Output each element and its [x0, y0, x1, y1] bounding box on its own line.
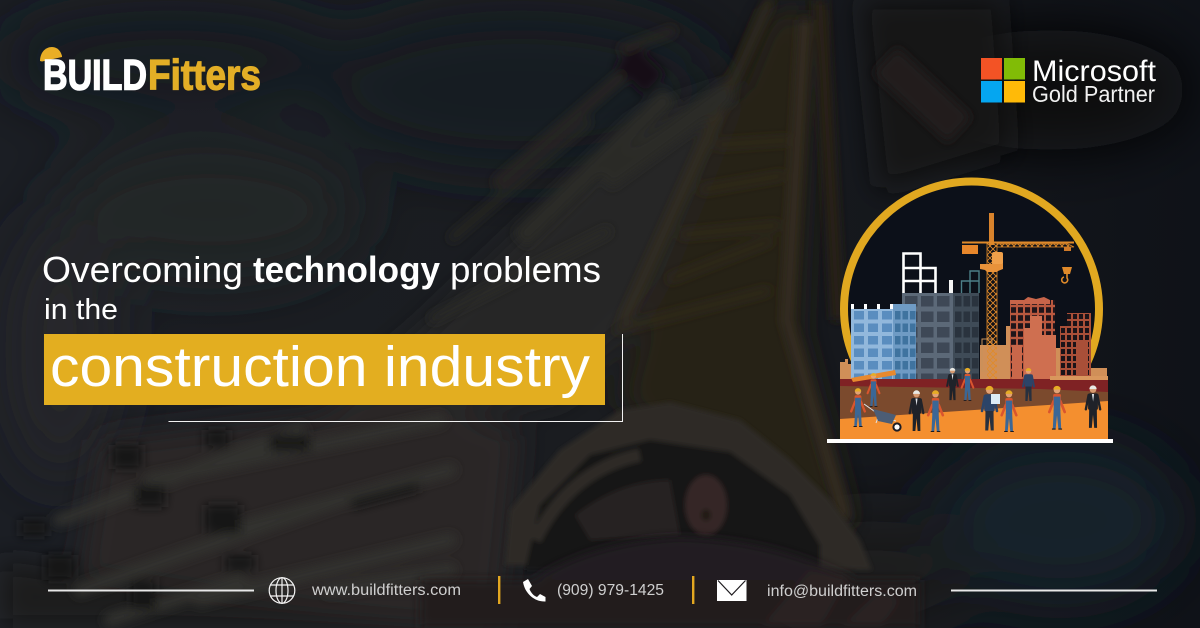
icon: envelope	[717, 580, 746, 601]
phone number: (909) 979-1425	[557, 582, 664, 599]
tan skyline	[840, 325, 1107, 380]
plank	[851, 370, 896, 382]
corner bracket	[168, 334, 622, 422]
shirt and footer tint	[420, 537, 920, 628]
Gold Partner text: Gold Partner	[1032, 81, 1155, 107]
crane	[962, 213, 1074, 379]
red buildings	[982, 297, 1091, 380]
footer rule right	[951, 590, 1157, 592]
dark circle backdrop	[844, 182, 1098, 436]
lattice in photo	[20, 420, 450, 620]
gold divider	[498, 576, 500, 604]
Microsoft wordmark: Microsoft	[1032, 55, 1157, 88]
icon: yellow hard hat	[40, 47, 62, 62]
grey building	[902, 293, 979, 380]
logo word: Fitters: Fitters	[148, 52, 261, 100]
white base line	[827, 439, 1113, 443]
yellow ring	[844, 182, 1099, 436]
website: www.buildfitters.com	[311, 582, 461, 599]
crane base over tan	[987, 340, 997, 380]
workers	[851, 368, 1100, 432]
heading line 1: technology	[253, 249, 440, 290]
illustration: construction site	[827, 182, 1113, 443]
logo: BuildFitters	[40, 47, 261, 100]
heading line 1: problems	[450, 249, 601, 290]
teal frame	[962, 271, 979, 293]
email: info@buildfitters.com	[767, 583, 917, 600]
gold divider	[692, 576, 694, 604]
logo: Microsoft Gold Partner	[981, 55, 1157, 107]
white frame on top of building	[904, 254, 936, 293]
footer rule left	[48, 590, 254, 592]
heading line 1: Overcoming	[42, 249, 243, 290]
highlight bar	[44, 334, 605, 405]
blue building	[851, 304, 916, 380]
icon: globe	[269, 578, 295, 603]
footer contact bar	[48, 576, 1157, 604]
heading line 2: in the	[44, 294, 118, 326]
tower and planks in photo	[430, 0, 960, 520]
highlighted heading: construction industry	[50, 335, 591, 399]
blueprint	[991, 394, 1000, 404]
logo word: BUILD: BUILD	[43, 52, 147, 100]
ground	[840, 376, 1108, 439]
helmet in photo	[505, 402, 872, 570]
icon: phone	[523, 579, 546, 602]
icon: Microsoft squares	[981, 58, 1025, 102]
title block	[42, 249, 622, 422]
wheelbarrow	[864, 404, 901, 431]
